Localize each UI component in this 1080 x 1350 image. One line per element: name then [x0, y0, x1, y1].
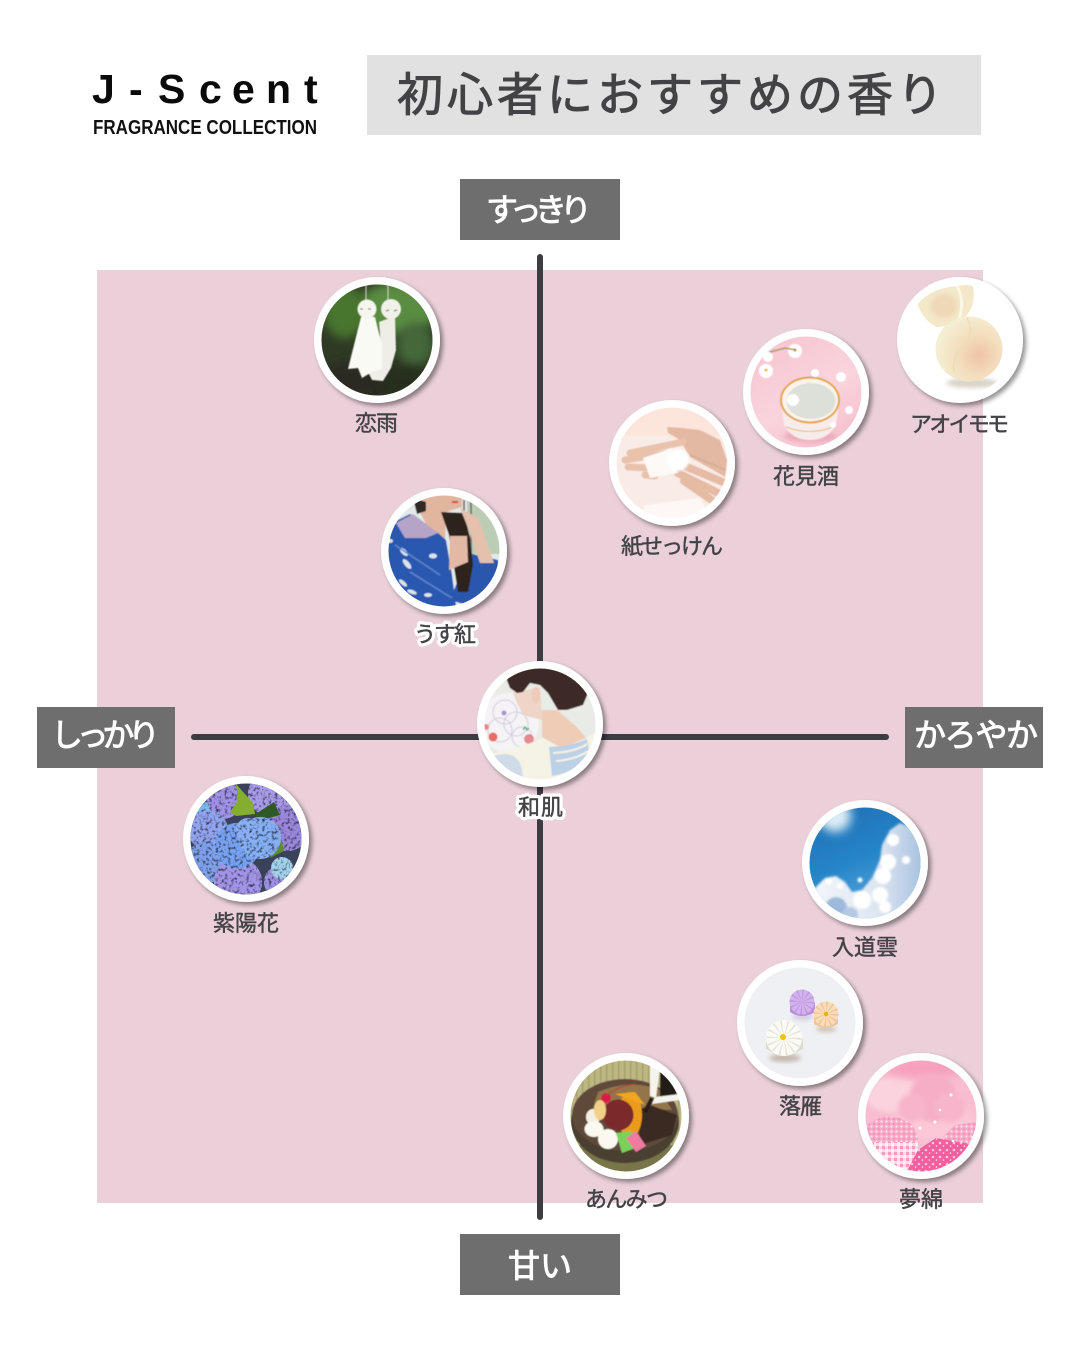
label: 落雁	[779, 1094, 822, 1119]
logo: J-Scent: FRAGRANCE COLLECTION	[93, 117, 317, 139]
axis label: left	[37, 707, 175, 768]
title banner: 初心者におすすめの香り	[397, 69, 943, 121]
label: うす紅	[414, 622, 476, 647]
axis label: right: かろやか	[914, 717, 1038, 753]
photo: woman in blue yukata	[388, 496, 500, 606]
axis label: left: しっかり	[51, 717, 160, 753]
marker: 入道雲	[802, 800, 928, 960]
axis label: top	[460, 179, 620, 240]
logo: J-Scent	[92, 66, 318, 139]
photo: sake cup with cherry blossoms	[750, 336, 862, 448]
photo: pink cotton candy collage	[865, 1058, 977, 1177]
marker: 花見酒	[743, 329, 869, 489]
label: 紫陽花	[213, 911, 279, 936]
photo: hydrangea	[190, 784, 302, 894]
photo: anmitsu bowl	[570, 1060, 682, 1175]
photo: woman's back with fan	[484, 668, 596, 780]
axis label: bottom: 甘い	[508, 1248, 572, 1284]
title banner	[367, 55, 981, 135]
marker: 紫陽花	[183, 772, 310, 936]
axis label: top: すっきり	[486, 192, 592, 228]
axis label: bottom	[460, 1234, 620, 1295]
label: 和肌	[518, 795, 563, 820]
photo: teru teru bozu	[322, 284, 432, 396]
horizontal axis line	[191, 734, 889, 740]
photo: white peaches	[918, 285, 1002, 390]
marker: うす紅	[381, 488, 507, 647]
label: 花見酒	[773, 464, 839, 489]
label: 恋雨	[355, 411, 398, 436]
marker: 夢綿	[858, 1053, 984, 1212]
marker: 紙せっけん	[609, 400, 735, 559]
marker: 和肌	[477, 661, 603, 820]
label: 和肌	[518, 795, 563, 820]
label: 入道雲	[832, 935, 898, 960]
label: 紙せっけん	[621, 534, 723, 559]
marker: 恋雨	[314, 277, 440, 436]
label: アオイモモ	[910, 412, 1009, 437]
label: 夢綿	[899, 1187, 943, 1212]
marker: アオイモモ	[897, 277, 1023, 437]
vertical axis line	[537, 254, 543, 1220]
marker: あんみつ	[563, 1053, 689, 1212]
positioning map background	[97, 270, 983, 1203]
axis label: right	[905, 707, 1043, 768]
label: あんみつ	[585, 1187, 668, 1212]
photo: flower-shaped rakugan sweets	[744, 967, 856, 1079]
label: うす紅	[414, 622, 476, 647]
logo: J-Scent: J-Scent	[92, 66, 318, 112]
photo: hands with paper soap	[615, 406, 731, 520]
marker: 落雁	[737, 960, 863, 1119]
photo: summer sky with cumulonimbus	[810, 808, 920, 918]
